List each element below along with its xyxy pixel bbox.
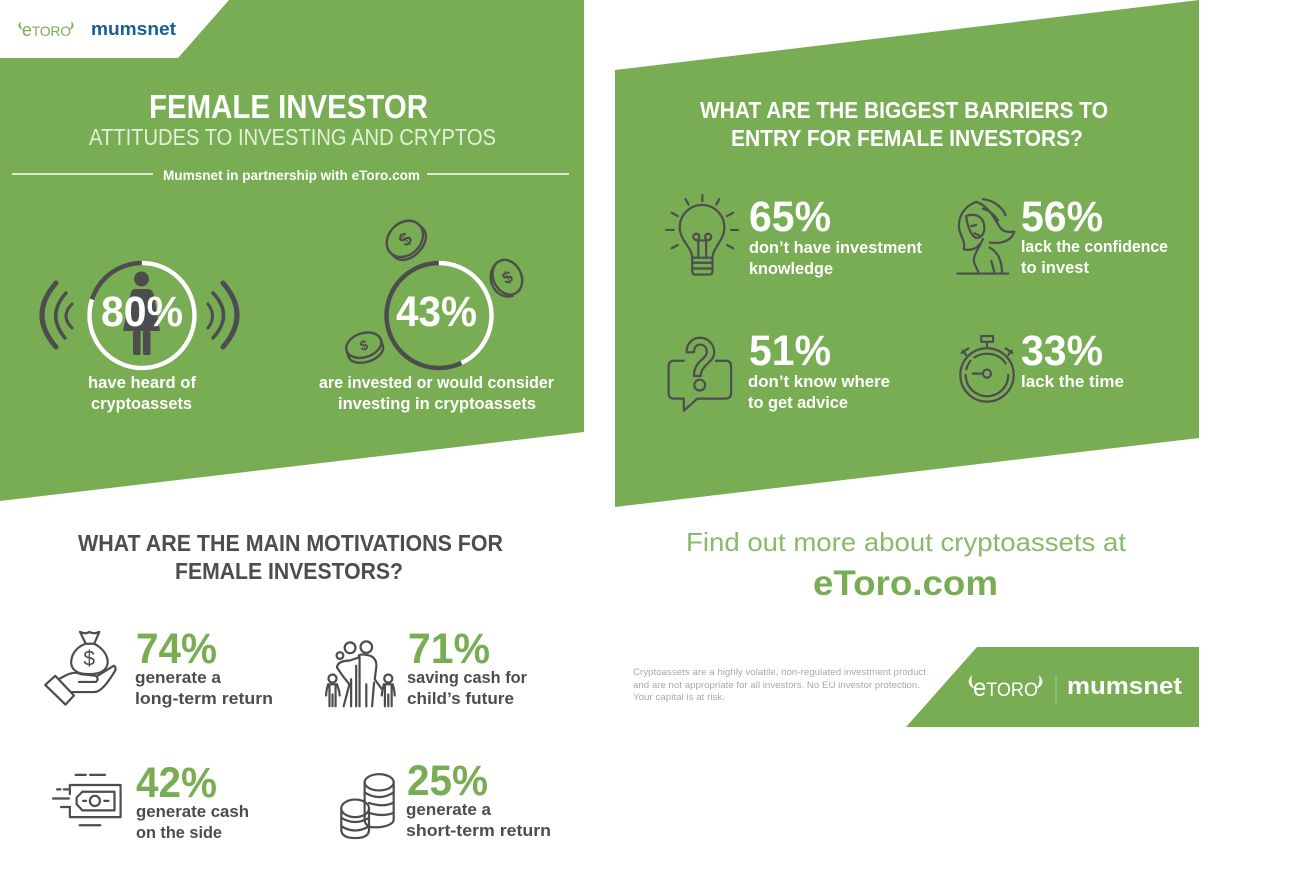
icon: coin top: $ — [395, 228, 417, 251]
icon: family — [326, 641, 395, 706]
icon: coin right — [484, 255, 528, 302]
panel: female investor header and stats — [0, 0, 584, 501]
stat: 42%: 42% — [136, 759, 217, 807]
icon: sound waves right — [208, 283, 237, 347]
label: where to get advice — [748, 372, 890, 412]
label: saving for child: child’s future — [407, 689, 514, 708]
section: motivations — [45, 530, 551, 842]
label: cash on the side: generate cash — [136, 802, 249, 821]
label: saving for child: saving cash for — [407, 668, 527, 687]
panel: barriers to entry — [615, 0, 1199, 507]
heading: barriers: ENTRY FOR FEMALE INVESTORS? — [731, 125, 1083, 151]
stat: 33%: 33% — [1021, 327, 1103, 375]
heading: barriers — [700, 97, 1108, 151]
icon: banknote — [53, 775, 121, 825]
logo: eToro white: eTORO — [973, 674, 1038, 702]
logo: mumsnet white: mumsnet — [1067, 673, 1182, 700]
partnership line: Mumsnet in partnership with eToro.com — [163, 167, 420, 183]
label: are invested or would consider — [319, 373, 554, 413]
label: lack the confidence: to invest — [1021, 258, 1089, 277]
label: long-term return: generate a — [135, 668, 222, 687]
label: no investment knowledge: don’t have investment — [749, 238, 922, 257]
disclaimer: Your capital is at risk. — [633, 692, 725, 703]
icon: coin right: $ — [499, 267, 516, 288]
disclaimer: and are not appropriate for all investors. No EU investor protection. — [633, 680, 920, 691]
stat: 56%: 56% — [1021, 193, 1103, 241]
label: where to get advice: to get advice — [748, 393, 848, 412]
label: have heard of cryptoassets — [88, 373, 196, 413]
label: have heard of cryptoassets: have heard of — [88, 373, 196, 392]
icon: coin bottom: $ — [358, 336, 370, 354]
label: saving for child — [407, 668, 527, 708]
label: short-term return — [406, 800, 551, 840]
label: short-term return: generate a — [406, 800, 492, 819]
ring chart: 43% — [386, 263, 492, 368]
call to action — [686, 527, 1127, 603]
disclaimer: Cryptoassets are a highly volatile, non-regulated investment product — [633, 667, 926, 678]
logo: eToro: eTORO — [22, 20, 71, 40]
label: lack the confidence — [1021, 237, 1168, 277]
label: long-term return: long-term return — [135, 689, 273, 708]
icon: worried woman — [958, 199, 1014, 274]
stat: 51%: 51% — [749, 327, 831, 375]
label: where to get advice: don’t know where — [748, 372, 890, 391]
stat: 71%: 71% — [408, 625, 490, 673]
icon: hand holding money bag: $ — [83, 648, 95, 671]
disclaimer — [633, 667, 926, 703]
heading: motivations — [78, 530, 503, 584]
ring chart: 80% — [90, 263, 194, 368]
title: FEMALE INVESTOR — [149, 88, 428, 125]
icon: hand holding money bag — [45, 632, 116, 705]
label: are invested or would consider: investing in cryptoassets — [338, 394, 536, 413]
stat: 43%: 43% — [396, 288, 477, 336]
label: no investment knowledge: knowledge — [749, 259, 833, 278]
logo: mumsnet: mumsnet — [91, 19, 176, 39]
stat: 25%: 25% — [407, 757, 488, 805]
stat: 80%: 80% — [101, 288, 183, 336]
icon: coin top — [379, 213, 432, 266]
heading: motivations: FEMALE INVESTORS? — [175, 558, 403, 584]
stat: 65%: 65% — [749, 193, 831, 241]
icon: light bulb — [666, 195, 738, 275]
footer logo banner — [906, 647, 1199, 727]
icon: sound waves left — [42, 283, 72, 347]
icon: coin bottom — [343, 328, 386, 367]
label: short-term return: short-term return — [406, 821, 551, 840]
label: no investment knowledge — [749, 238, 922, 278]
label: lack the confidence: lack the confidence — [1021, 237, 1168, 256]
icon: woman figure — [123, 272, 160, 355]
label: cash on the side: on the side — [136, 823, 222, 842]
call to action: Find out more about cryptoassets at — [686, 527, 1127, 557]
label: cash on the side — [136, 802, 249, 842]
icon: coin stacks — [341, 774, 394, 838]
label: long-term return — [135, 668, 273, 708]
stat: 74%: 74% — [136, 625, 217, 673]
label: have heard of cryptoassets: cryptoassets — [91, 394, 192, 413]
label: are invested or would consider: are invested or would consider — [319, 373, 554, 392]
heading: barriers: WHAT ARE THE BIGGEST BARRIERS TO — [700, 97, 1108, 123]
subtitle: ATTITUDES TO INVESTING AND CRYPTOS — [89, 124, 496, 150]
icon: question speech bubble — [669, 338, 731, 411]
call to action: eToro.com — [813, 564, 998, 603]
label: lack the time: lack the time — [1021, 372, 1124, 391]
heading: motivations: WHAT ARE THE MAIN MOTIVATIONS FOR — [78, 530, 503, 556]
icon: stopwatch — [960, 336, 1014, 402]
